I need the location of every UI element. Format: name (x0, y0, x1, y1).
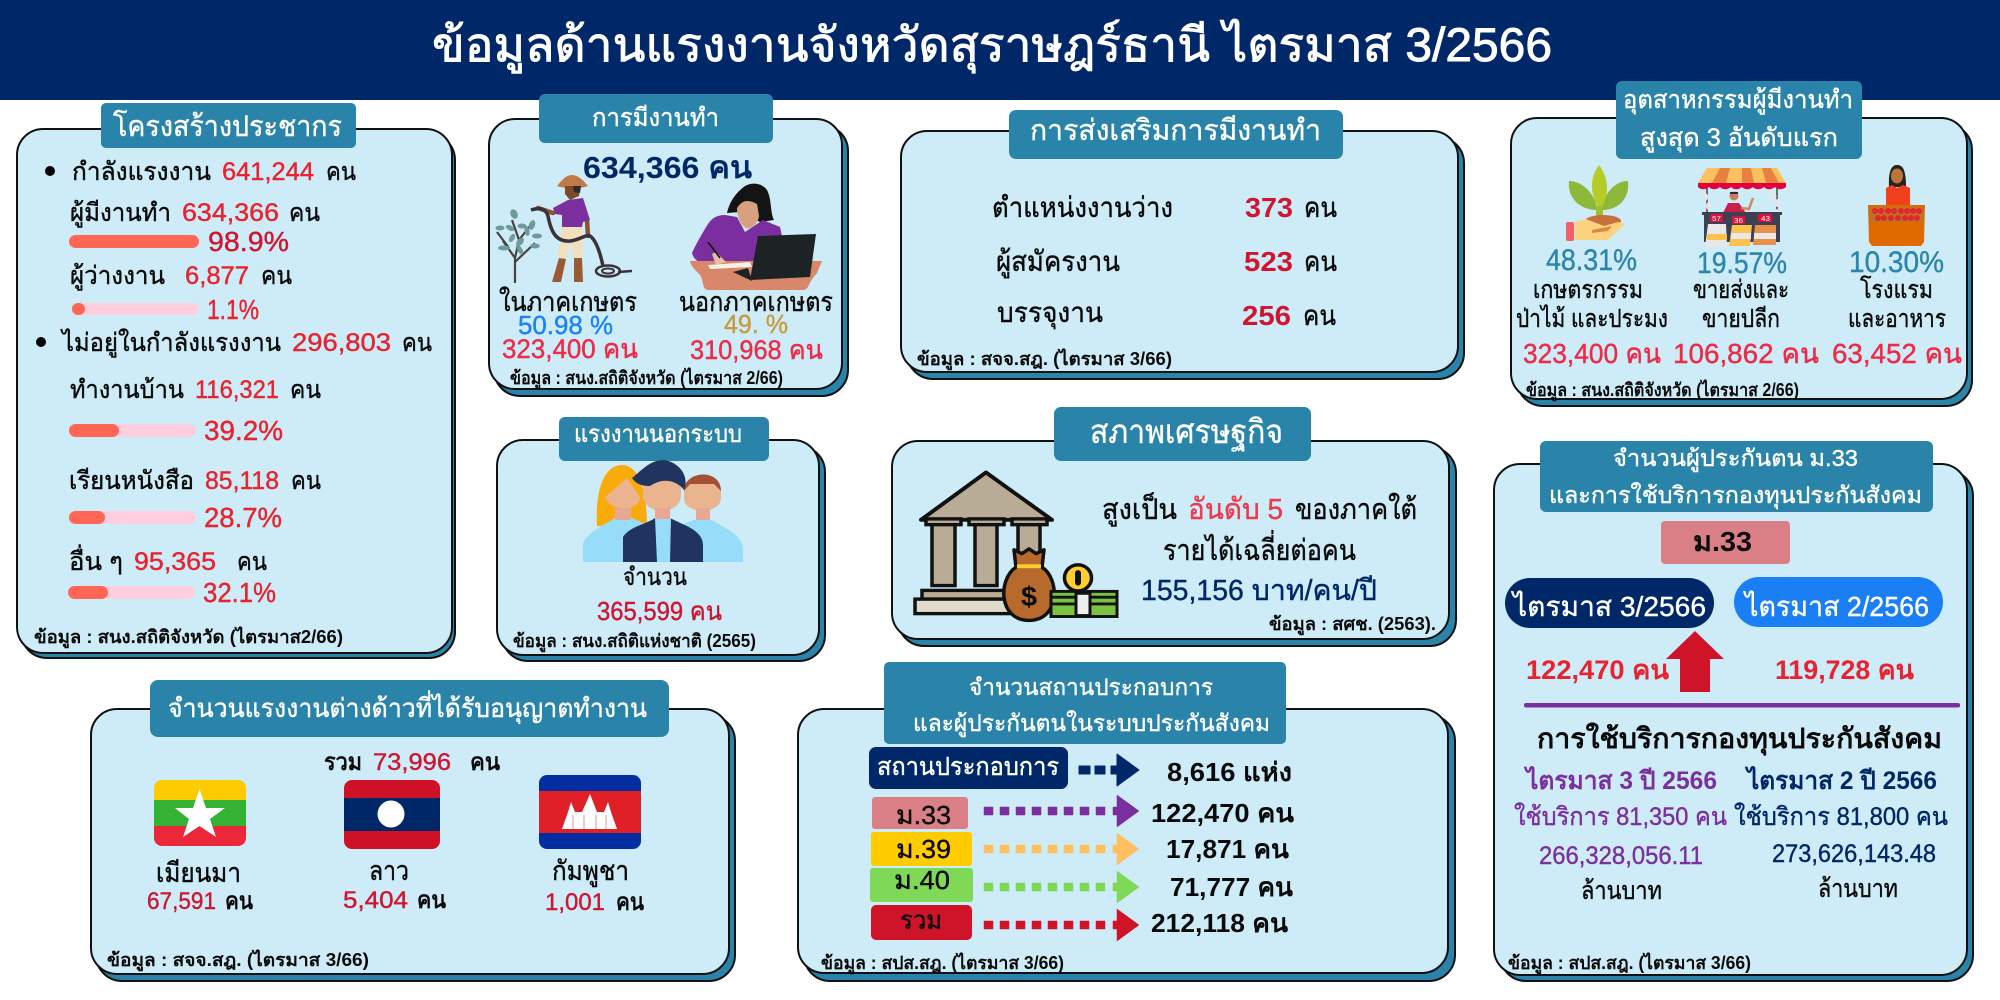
agriculture stats (1516, 244, 1668, 369)
agriculture stats: 323,400 คน (1523, 338, 1661, 369)
heading: informal labour: แรงงานนอกระบบ (574, 421, 742, 448)
source note: ข้อมูล : สจจ.สฎ. (ไตรมาส 3/66) (917, 348, 1172, 371)
hotel and food stats (1832, 246, 1962, 369)
employed row: คน (289, 199, 320, 227)
row: section 39 (871, 832, 1289, 866)
Cambodia stats: กัมพูชา (552, 856, 629, 887)
row: total: รวม (900, 905, 942, 935)
heading: top 3 industries (1616, 81, 1862, 159)
fund usage quarter 3: 266,328,056.11 (1539, 842, 1703, 870)
housework row: 116,321 (195, 376, 279, 404)
agricultural sector stats: 50.98 % (518, 310, 613, 340)
panel: economy (892, 407, 1456, 646)
heading: employment promotion (1009, 110, 1343, 159)
subheading: fund usage: การใช้บริการกองทุนประกันสังคม (1537, 722, 1942, 756)
migrant total: คน (470, 749, 501, 776)
wholesale and retail stats: ขายส่งและ (1693, 276, 1789, 304)
panel: top 3 industries (1511, 81, 1972, 406)
Laos stats: คน (417, 887, 447, 914)
quarter 3 value: 122,470 คน (1526, 655, 1670, 685)
vacancies row: ตำแหน่งงานว่าง (992, 192, 1173, 223)
wholesale and retail stats: 106,862 คน (1673, 338, 1819, 369)
income value: 155,156 บาท/คน/ปี (1141, 575, 1377, 607)
source note: ข้อมูล : สนง.สถิติจังหวัด (ไตรมาส 2/66) (1526, 379, 1799, 402)
heading: economy (1054, 407, 1311, 461)
rank statement (1102, 491, 1417, 527)
agricultural sector stats: ในภาคเกษตร (499, 286, 637, 317)
source note: ข้อมูล : สศช. (2563). (1269, 614, 1436, 636)
agricultural sector stats (499, 286, 638, 364)
vacancies row (992, 192, 1337, 223)
bar: unemployed 1.1%: 1.1% (207, 294, 259, 325)
heading: top 3 industries: สูงสุด 3 อันดับแรก (1640, 124, 1838, 153)
employed row (70, 199, 320, 228)
hotel and food stats: 63,452 คน (1832, 338, 1962, 369)
fund usage quarter 2: 273,626,143.48 (1772, 840, 1936, 868)
icon: market stall: 57 (1712, 216, 1721, 223)
labour force row: คน (326, 158, 356, 186)
Laos stats (343, 856, 447, 914)
Laos stats: ลาว (369, 856, 409, 886)
heading: economy: สภาพเศรษฐกิจ (1090, 413, 1283, 452)
section 33 badge (1661, 521, 1790, 564)
Cambodia stats: คน (616, 889, 645, 916)
heading: migrant workers: จำนวนแรงงานต่างด้าวที่ได้รับอนุญาตทำงาน (168, 690, 647, 724)
heading: top 3 industries: อุตสาหกรรมผู้มีงานทำ (1623, 86, 1853, 115)
row: section 40: ม.40 (894, 865, 950, 895)
panel: section 33 insured and social security fund (1494, 441, 1973, 981)
migrant total: 73,996 (373, 749, 451, 776)
source note: ข้อมูล : สปส.สฎ. (ไตรมาส 3/66) (1508, 952, 1751, 975)
wholesale and retail stats (1673, 247, 1819, 369)
agriculture stats: 48.31% (1546, 244, 1637, 277)
heading: establishments: จำนวนสถานประกอบการ (969, 674, 1213, 700)
hotel and food stats: โรงแรม (1860, 275, 1933, 304)
icon: Laos flag (344, 780, 440, 849)
informal labour count: 365,599 คน (597, 596, 722, 626)
agriculture stats: เกษตรกรรม (1533, 276, 1643, 304)
applicants row: ผู้สมัครงาน (996, 246, 1120, 279)
unemployed row: ผู้ว่างงาน (70, 262, 165, 291)
rank statement: อันดับ 5 (1188, 494, 1283, 526)
icon: bank with money bag (915, 472, 1117, 620)
migrant total: รวม (324, 749, 362, 776)
non-agricultural sector stats (679, 287, 833, 365)
Cambodia stats (545, 856, 645, 916)
heading: migrant workers (150, 680, 669, 737)
other row: อื่น ๆ (69, 544, 123, 576)
icon: market stall (1698, 168, 1786, 247)
hotel and food stats: 10.30% (1849, 246, 1944, 279)
icon: three people (583, 460, 743, 562)
income label: รายได้เฉลี่ยต่อคน (1163, 530, 1356, 567)
row: establishments: สถานประกอบการ (877, 753, 1059, 781)
panel: informal labour (497, 417, 825, 661)
fund usage quarter 3: ล้านบาท (1581, 877, 1662, 905)
placed row (997, 297, 1336, 331)
source note: ข้อมูล : สนง.สถิติจังหวัด (ไตรมาส 2/66) (510, 367, 783, 390)
employed row: ผู้มีงานทำ (70, 199, 171, 228)
row: section 39: 17,871 คน (1166, 834, 1289, 864)
agriculture stats: ป่าไม้ และประมง (1516, 304, 1668, 333)
total employed: 634,366 คน (583, 150, 752, 185)
fund usage quarter 3 (1514, 765, 1727, 905)
housework row (70, 376, 321, 404)
fund usage quarter 2: ใช้บริการ 81,800 คน (1734, 802, 1948, 831)
housework row: คน (290, 376, 321, 404)
row: section 40 (870, 865, 1293, 903)
pill: quarter 2/2566: ไตรมาส 2/2566 (1743, 591, 1929, 622)
Myanmar stats (147, 858, 254, 915)
labour force row: กำลังแรงงาน (72, 158, 211, 186)
bar: other 32.1%: 32.1% (203, 577, 276, 608)
heading: section 33 (1540, 441, 1933, 512)
wholesale and retail stats: 19.57% (1697, 247, 1787, 280)
pill: quarter 3/2566: ไตรมาส 3/2566 (1511, 591, 1706, 622)
rank statement: ของภาคใต้ (1295, 492, 1417, 526)
heading: section 33: จำนวนผู้ประกันตน ม.33 (1613, 445, 1858, 472)
heading: section 33: และการใช้บริการกองทุนประกันสังคม (1549, 482, 1922, 509)
panel: employment promotion (901, 110, 1464, 379)
placed row: บรรจุงาน (997, 297, 1103, 330)
unemployed row (70, 262, 292, 291)
row: total (871, 905, 1288, 941)
other row (69, 544, 267, 576)
row: section 33: 122,470 คน (1151, 798, 1294, 828)
migrant total (324, 749, 501, 776)
wholesale and retail stats: ขายปลีก (1702, 305, 1780, 333)
placed row: 256 (1242, 300, 1291, 331)
panel: establishments and insured (798, 662, 1455, 981)
outside labour force row: 296,803 (292, 329, 391, 357)
source note: ข้อมูล : สนง.สถิติจังหวัด (ไตรมาส2/66) (34, 626, 343, 649)
applicants row (996, 246, 1337, 279)
row: total: 212,118 คน (1151, 908, 1288, 938)
outside labour force row: คน (402, 329, 432, 357)
employed row: 634,366 (182, 199, 279, 227)
placed row: คน (1303, 300, 1336, 331)
row: section 33: ม.33 (896, 800, 951, 830)
studying row: เรียนหนังสือ (69, 467, 194, 495)
icon: farmer watering tree (496, 175, 632, 283)
bar: other 32.1% (68, 577, 276, 608)
Myanmar stats: 67,591 (147, 888, 216, 915)
title: ข้อมูลด้านแรงงานจังหวัดสุราษฎร์ธานี ไตรมาส 3/2566 (432, 18, 1552, 74)
icon: Myanmar flag (154, 780, 246, 846)
rank statement: สูงเป็น (1102, 491, 1177, 527)
row: establishments (869, 747, 1292, 789)
arrow: increase (1666, 631, 1724, 692)
bar: employed 98.9% (69, 226, 289, 257)
fund usage quarter 2: ไตรมาส 2 ปี 2566 (1744, 765, 1937, 795)
bar: studying 28.7%: 28.7% (204, 502, 282, 533)
count label: จำนวน (623, 564, 687, 591)
Myanmar stats: คน (225, 888, 254, 915)
fund usage quarter 3: ใช้บริการ 81,350 คน (1514, 802, 1727, 831)
source note: ข้อมูล : สจจ.สฎ. (ไตรมาส 3/66) (107, 949, 369, 972)
row: section 33 (872, 795, 1294, 830)
header banner (0, 0, 2000, 100)
heading: employment: การมีงานทำ (592, 104, 719, 132)
icon: bank with money bag: $ (1021, 581, 1037, 613)
housework row: ทำงานบ้าน (70, 376, 184, 404)
bar: employed 98.9%: 98.9% (208, 226, 289, 257)
bar: studying 28.7% (69, 502, 282, 533)
icon: market stall: 36 (1734, 218, 1743, 225)
pill: quarter 2/2566 (1734, 577, 1943, 627)
source note: ข้อมูล : สนง.สถิติแห่งชาติ (2565) (513, 631, 756, 653)
bar: housework 39.2% (69, 415, 283, 446)
heading: employment (539, 94, 773, 143)
non-agricultural sector stats: นอกภาคเกษตร (679, 287, 833, 317)
icon: hotel and food vendor (1868, 165, 1925, 246)
fund usage quarter 2 (1734, 765, 1948, 903)
vacancies row: 373 (1245, 192, 1293, 223)
quarter 2 value: 119,728 คน (1775, 655, 1915, 685)
unemployed row: 6,877 (185, 262, 249, 290)
non-agricultural sector stats: 49. % (724, 309, 788, 339)
panel: population structure (17, 103, 455, 658)
hotel and food stats: และอาหาร (1848, 305, 1946, 333)
row: section 40: 71,777 คน (1170, 872, 1293, 902)
fund usage quarter 3: ไตรมาส 3 ปี 2566 (1523, 765, 1717, 795)
heading: population structure: โครงสร้างประชากร (113, 109, 342, 143)
outside labour force row: ไม่อยู่ในกำลังแรงงาน (60, 328, 281, 358)
fund usage quarter 2: ล้านบาท (1818, 875, 1898, 903)
Laos stats: 5,404 (343, 887, 408, 914)
icon: market stall: 43 (1761, 216, 1770, 223)
unemployed row: คน (261, 262, 292, 290)
bar: housework 39.2%: 39.2% (204, 415, 283, 446)
studying row: คน (291, 467, 321, 495)
other row: 95,365 (134, 548, 216, 576)
row: section 39: ม.39 (896, 834, 951, 864)
other row: คน (237, 548, 267, 576)
heading: establishments: และผู้ประกันตนในระบบประกันสังคม (913, 710, 1270, 737)
labour force row (45, 158, 356, 186)
panel: migrant workers (91, 680, 735, 981)
icon: plant in hand (1566, 165, 1628, 241)
heading: informal labour (559, 417, 769, 461)
applicants row: คน (1304, 246, 1337, 277)
row: establishments: 8,616 แห่ง (1167, 757, 1292, 787)
studying row: 85,118 (205, 467, 279, 495)
vacancies row: คน (1304, 192, 1337, 223)
heading: establishments (884, 662, 1286, 744)
icon: Cambodia flag (539, 775, 641, 849)
non-agricultural sector stats: 310,968 คน (690, 335, 823, 365)
section 33 badge: ม.33 (1693, 526, 1752, 557)
panel: employment (489, 94, 848, 396)
applicants row: 523 (1244, 246, 1293, 277)
icon: office worker with laptop (690, 184, 822, 290)
agricultural sector stats: 323,400 คน (502, 334, 638, 364)
pill: quarter 3/2566 (1505, 578, 1714, 628)
bar: unemployed 1.1% (72, 294, 259, 325)
Myanmar stats: เมียนมา (156, 858, 241, 888)
studying row (69, 467, 321, 495)
outside labour force row (36, 328, 432, 358)
heading: employment promotion: การส่งเสริมการมีงานทำ (1030, 115, 1321, 147)
Cambodia stats: 1,001 (545, 889, 605, 916)
heading: population structure (101, 103, 356, 148)
source note: ข้อมูล : สปส.สฎ. (ไตรมาส 3/66) (821, 952, 1064, 975)
labour force row: 641,244 (222, 158, 314, 186)
